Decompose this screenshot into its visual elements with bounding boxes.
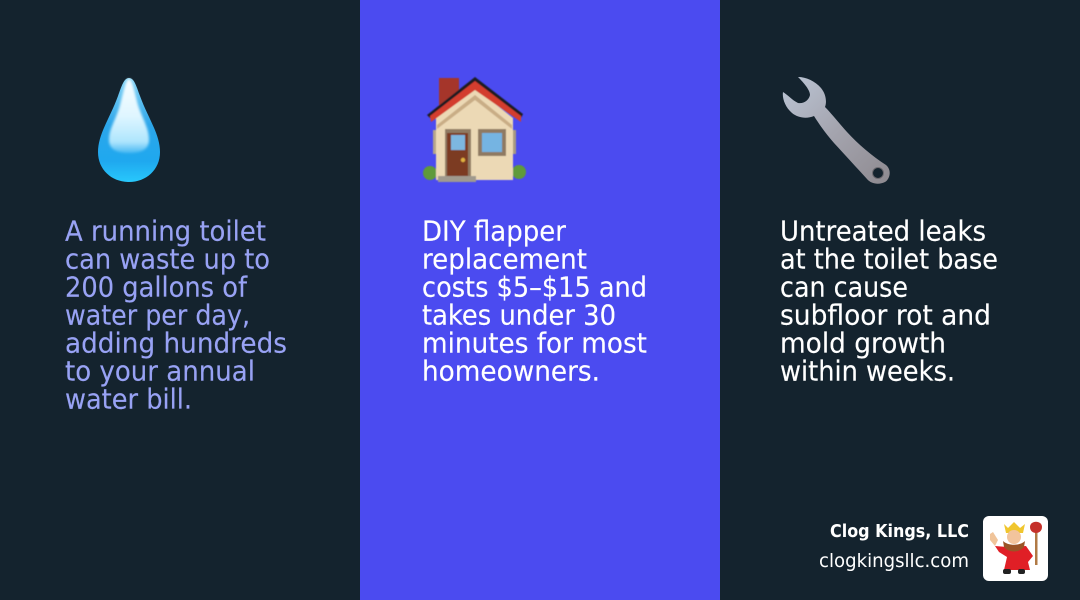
text: DIY repair fact: homeowners. [422, 356, 600, 388]
brand: company name and website: clogkingsllc.com [819, 550, 969, 572]
text: untreated leaks fact: within weeks. [780, 356, 955, 388]
text: untreated leaks fact: at the toilet base [780, 244, 998, 276]
icon: water drop [98, 78, 160, 182]
text: DIY repair fact: minutes for most [422, 328, 647, 360]
icon: wrench [783, 77, 890, 184]
brand: company name and website [819, 521, 969, 572]
panel: untreated leaks [720, 0, 1080, 600]
text: DIY repair fact: takes under 30 [422, 300, 616, 332]
text: water waste fact: water bill. [65, 384, 192, 416]
text: DIY repair fact: replacement [422, 244, 587, 276]
text: water waste fact: water per day, [65, 300, 250, 332]
text: untreated leaks fact: mold growth [780, 328, 946, 360]
text: water waste fact: A running toilet [65, 216, 266, 248]
icon: house [423, 77, 526, 182]
text: water waste fact: 200 gallons of [65, 272, 248, 304]
brand: company name and website: Clog Kings, LLC [830, 521, 969, 542]
text: water waste fact: adding hundreds [65, 328, 287, 360]
text: untreated leaks fact [780, 216, 998, 388]
text: untreated leaks fact: Untreated leaks [780, 216, 986, 248]
logo: plunger king [983, 516, 1048, 581]
panel: DIY repair [360, 0, 720, 600]
text: DIY repair fact [422, 216, 647, 388]
text: water waste fact: can waste up to [65, 244, 270, 276]
text: untreated leaks fact: subfloor rot and [780, 300, 991, 332]
text: water waste fact: to your annual [65, 356, 255, 388]
text: untreated leaks fact: can cause [780, 272, 908, 304]
text: DIY repair fact: DIY flapper [422, 216, 567, 248]
panel: water waste [0, 0, 360, 600]
text: water waste fact [65, 216, 287, 416]
text: DIY repair fact: costs $5–$15 and [422, 272, 647, 304]
